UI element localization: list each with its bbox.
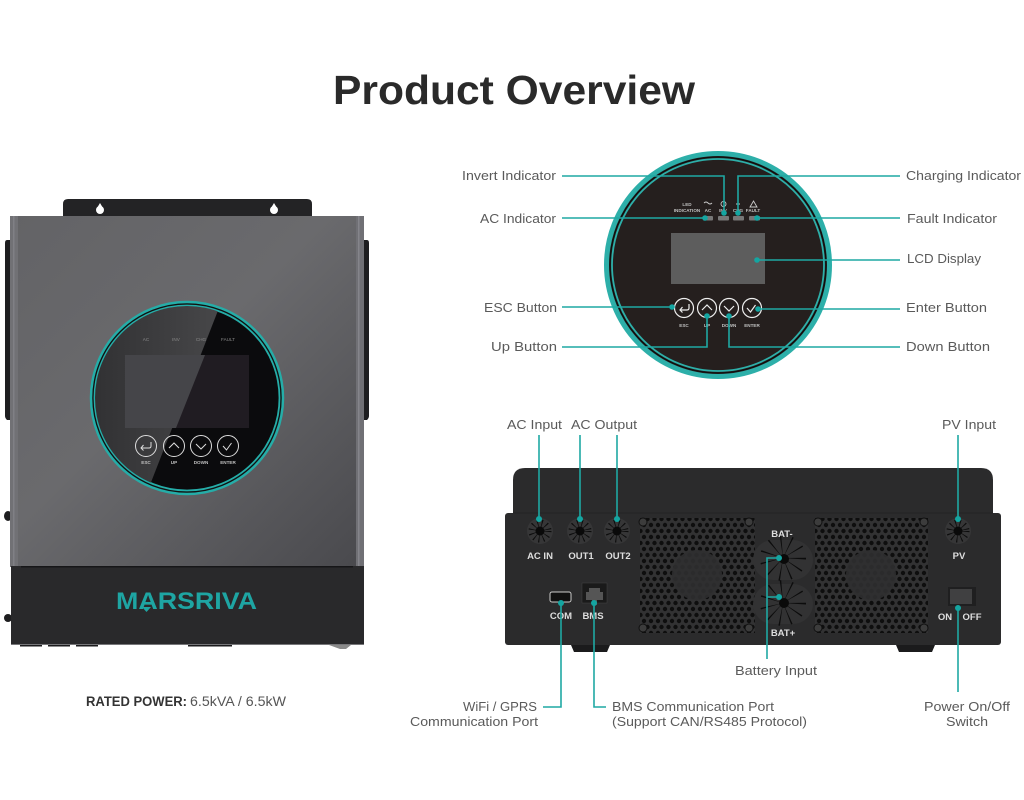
AC input bbox=[507, 417, 562, 522]
enter button bbox=[755, 300, 987, 315]
down button bbox=[726, 313, 990, 354]
AC indicator bbox=[480, 211, 708, 226]
ESC button bbox=[484, 300, 675, 315]
ports bbox=[550, 583, 607, 605]
status labels bbox=[143, 337, 235, 342]
WiFi / GPRS port bbox=[410, 600, 564, 729]
LED bars bbox=[703, 216, 760, 220]
AC indicator: AC Indicator bbox=[480, 211, 557, 226]
rated power bbox=[86, 694, 286, 709]
callouts: rear panel bbox=[410, 417, 1010, 729]
rated power: RATED POWER: bbox=[86, 694, 187, 709]
control panel: ENTER bbox=[220, 460, 236, 465]
charging indicator: Charging Indicator bbox=[906, 168, 1022, 183]
LED labels: LED bbox=[682, 202, 692, 207]
power switch bbox=[948, 587, 976, 606]
status labels: FAULT bbox=[221, 337, 235, 342]
mounting bracket bbox=[63, 199, 312, 216]
battery input bbox=[735, 555, 817, 678]
WiFi / GPRS port: WiFi / GPRS bbox=[463, 699, 537, 714]
status labels: INV bbox=[172, 337, 181, 342]
port labels: PV bbox=[953, 551, 966, 562]
invert indicator bbox=[462, 168, 727, 216]
lower cover bbox=[11, 566, 364, 649]
battery terminals bbox=[753, 540, 813, 624]
round display panel detail bbox=[606, 154, 830, 376]
ESC button: ESC Button bbox=[484, 300, 557, 315]
control panel: UP bbox=[171, 460, 177, 465]
round display panel detail: UP bbox=[704, 323, 710, 328]
control buttons bbox=[674, 298, 762, 318]
cable glands bbox=[527, 518, 971, 544]
status labels: AC bbox=[143, 337, 150, 342]
title: Product Overview bbox=[333, 67, 695, 113]
power switch label: Switch bbox=[946, 714, 988, 729]
cooling fan right bbox=[814, 518, 928, 633]
rear view of inverter bbox=[505, 468, 1001, 652]
brand logo: MARSRIVA bbox=[116, 588, 257, 615]
callouts: display panel bbox=[462, 168, 1022, 354]
invert indicator: Invert Indicator bbox=[462, 168, 557, 183]
round display panel detail: DOWN bbox=[722, 323, 737, 328]
screen bbox=[125, 355, 249, 428]
up button bbox=[491, 313, 710, 354]
control panel: DOWN bbox=[194, 460, 209, 465]
rated power: 6.5kVA / 6.5kW bbox=[190, 694, 286, 709]
LED labels: FAULT bbox=[746, 208, 760, 213]
round display panel detail: ESC bbox=[679, 323, 689, 328]
PV input bbox=[942, 417, 996, 522]
port labels: OFF bbox=[962, 612, 982, 623]
enter button: Enter Button bbox=[906, 300, 987, 315]
charging indicator bbox=[735, 168, 1022, 216]
control panel bbox=[80, 290, 283, 494]
control panel: ESC bbox=[141, 460, 151, 465]
side handles bbox=[4, 240, 369, 622]
port labels: AC IN bbox=[527, 551, 553, 562]
LED labels: AC bbox=[705, 208, 712, 213]
chassis bbox=[505, 468, 1001, 652]
LCD display bbox=[754, 251, 981, 266]
status labels: CHG bbox=[196, 337, 207, 342]
LED labels: INV bbox=[719, 208, 728, 213]
housing bbox=[10, 216, 364, 567]
port labels bbox=[527, 529, 982, 639]
PV input: PV Input bbox=[942, 417, 996, 432]
AC output: AC Output bbox=[571, 417, 637, 432]
round display panel detail: ENTER bbox=[744, 323, 760, 328]
port labels: OUT1 bbox=[568, 551, 594, 562]
AC output bbox=[571, 417, 637, 522]
fault indicator bbox=[754, 211, 998, 226]
battery input: Battery Input bbox=[735, 663, 817, 678]
glass reflection bbox=[95, 306, 218, 482]
port labels: OUT2 bbox=[605, 551, 631, 562]
LCD screen bbox=[671, 233, 765, 284]
BMS communication port: BMS Communication Port bbox=[612, 699, 774, 714]
LED icons bbox=[704, 201, 757, 207]
cooling fan left bbox=[639, 518, 755, 633]
port labels: BAT- bbox=[771, 529, 793, 540]
front view of inverter bbox=[4, 199, 369, 649]
LED labels: INDICATION bbox=[674, 208, 701, 213]
WiFi / GPRS port: Communication Port bbox=[410, 714, 538, 729]
port labels: COM bbox=[550, 611, 572, 622]
port labels: BAT+ bbox=[771, 628, 796, 639]
power switch label: Power On/Off bbox=[924, 699, 1010, 714]
AC input: AC Input bbox=[507, 417, 562, 432]
power switch label bbox=[924, 605, 1010, 729]
up button: Up Button bbox=[491, 339, 557, 354]
LED labels: CHG bbox=[733, 208, 744, 213]
BMS communication port bbox=[591, 600, 807, 729]
down button: Down Button bbox=[906, 339, 990, 354]
LED labels bbox=[674, 202, 760, 213]
buttons bbox=[136, 436, 238, 456]
LCD display: LCD Display bbox=[907, 251, 981, 266]
port labels: BMS bbox=[582, 611, 604, 622]
fault indicator: Fault Indicator bbox=[907, 211, 998, 226]
BMS communication port: (Support CAN/RS485 Protocol) bbox=[612, 714, 807, 729]
port labels: ON bbox=[938, 612, 952, 623]
